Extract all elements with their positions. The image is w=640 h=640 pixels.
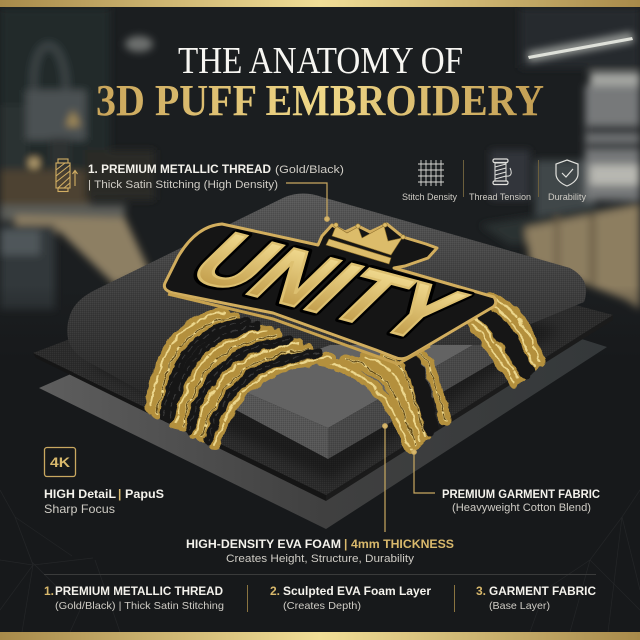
icon: durability shield [556, 160, 578, 186]
callout: premium metallic thread: | Thick Satin Stitching (High Density) [88, 179, 278, 191]
callout: high-density EVA foam: 4mm THICKNESS [351, 537, 454, 551]
leader line: thread [286, 183, 329, 221]
patch lettering: UNITY [169, 217, 486, 355]
bottom gold bar [0, 632, 640, 640]
summary item 2: (Creates Depth) [283, 600, 361, 612]
callout: high-density EVA foam [186, 537, 454, 565]
callout: premium garment fabric [442, 489, 600, 514]
top gold bar [0, 0, 640, 7]
feature labels [402, 192, 586, 202]
summary item 1: (Gold/Black) | Thick Satin Stitching [55, 600, 224, 612]
background geometric line pattern [0, 490, 640, 632]
summary item 3 [476, 584, 596, 612]
callout: premium garment fabric: PREMIUM GARMENT FABRIC [442, 489, 600, 501]
embroidered patch [164, 217, 496, 364]
title [96, 40, 544, 125]
layer: upper black fabric sheet [33, 240, 613, 501]
summary item 2: Sculpted EVA Foam Layer [283, 584, 431, 598]
summary item 1 [44, 584, 224, 612]
text: high detail: PapuS [125, 487, 164, 501]
callout: high-density EVA foam: Creates Height, Structure, Durability [226, 553, 415, 565]
text: high detail: HIGH DetaiL [44, 487, 116, 501]
summary item 3: GARMENT FABRIC [489, 584, 596, 598]
callout: premium metallic thread [88, 164, 344, 191]
callout: premium metallic thread: 1. PREMIUM METALLIC THREAD [88, 164, 271, 176]
icon: thread tension spool [493, 159, 511, 184]
thread drape: front [320, 353, 445, 448]
layer: EVA foam block [236, 300, 494, 459]
layer: garment fabric cushion [67, 194, 586, 402]
patch lettering: UNITY [169, 217, 486, 355]
title: 3D PUFF EMBROIDERY [96, 76, 544, 125]
badge: 4K [44, 448, 76, 476]
product stack illustration [33, 194, 613, 529]
crown [326, 223, 405, 264]
text: high detail: | [118, 487, 121, 501]
summary item 1: 1. [44, 584, 54, 598]
icon: thread spool with arrow [56, 159, 78, 192]
summary item 2: 2. [270, 584, 280, 598]
leader line: garment fabric [412, 450, 435, 493]
callout: premium garment fabric: (Heavyweight Cotton Blend) [452, 502, 591, 514]
leader line: foam [383, 424, 387, 532]
icon: stitch density [418, 160, 444, 186]
callout: high-density EVA foam: | [344, 537, 347, 551]
feature labels: Stitch Density [402, 192, 457, 202]
summary item 3: (Base Layer) [489, 600, 550, 612]
callout: high-density EVA foam: HIGH-DENSITY EVA FOAM [186, 537, 341, 551]
title: THE ANATOMY OF [178, 40, 463, 82]
layer: lower base sheet [39, 260, 607, 529]
feature labels: Thread Tension [469, 192, 531, 202]
shadow under cushion [90, 260, 560, 480]
text: high detail [44, 487, 164, 516]
summary item 3: 3. [476, 584, 486, 598]
text: high detail: Sharp Focus [44, 502, 115, 516]
callout: premium metallic thread: (Gold/Black) [275, 164, 344, 176]
summary item 1: PREMIUM METALLIC THREAD [55, 584, 223, 598]
thread drape: right [472, 298, 540, 382]
summary item 2 [270, 584, 431, 612]
thread drape: left [150, 312, 330, 445]
badge: 4K: 4K [50, 454, 70, 470]
feature labels: Durability [548, 192, 586, 202]
